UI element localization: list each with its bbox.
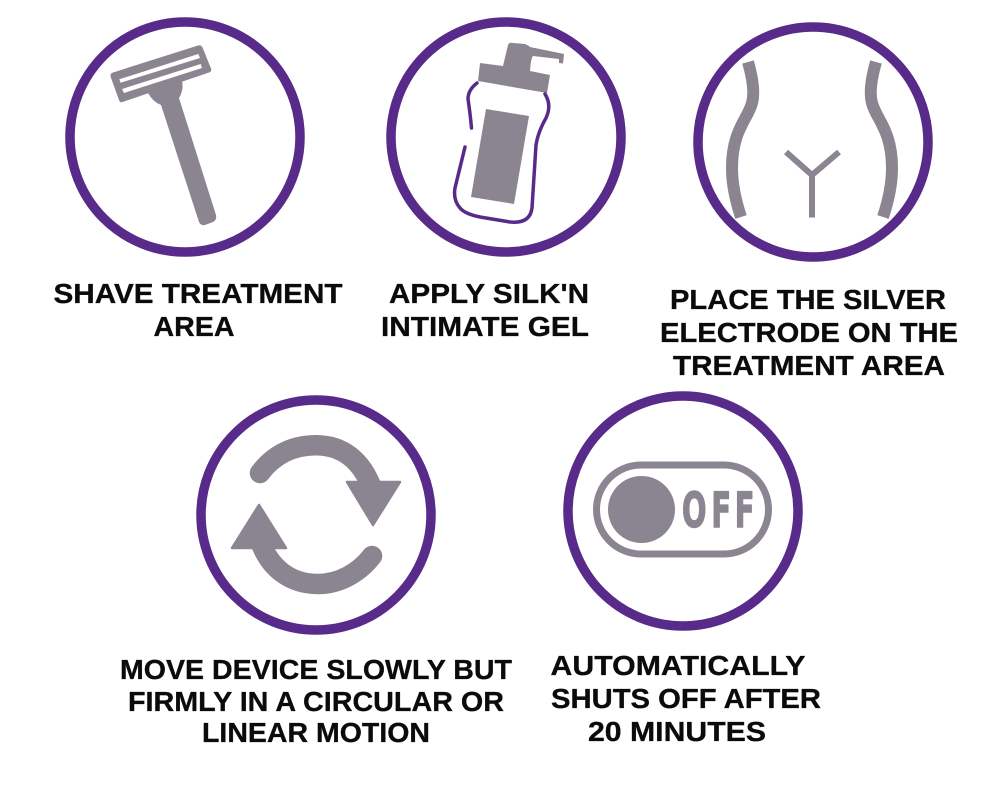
label: APPLY SILK'N bbox=[389, 278, 589, 309]
step 2: apply gel bbox=[381, 22, 621, 342]
label: 20 MINUTES bbox=[588, 716, 766, 747]
label: SHUTS OFF AFTER bbox=[551, 683, 821, 714]
label: LINEAR MOTION bbox=[202, 717, 430, 748]
icon: circular arrows bbox=[232, 445, 400, 584]
icon ring: razor circle bbox=[70, 22, 300, 252]
label: PLACE THE SILVER bbox=[670, 284, 946, 315]
step 5: auto shut off bbox=[550, 396, 821, 747]
icon: body outline bbox=[732, 62, 892, 218]
icon: gel bottle bbox=[455, 43, 564, 222]
label bbox=[120, 654, 512, 748]
icon ring: motion circle bbox=[201, 400, 431, 630]
label: AREA bbox=[154, 311, 235, 342]
step 4: move device bbox=[120, 400, 512, 748]
icon: off switch: OFF bbox=[682, 483, 754, 539]
step 3: place electrode bbox=[660, 27, 958, 381]
icon ring: body circle bbox=[698, 27, 928, 257]
label: INTIMATE GEL bbox=[381, 311, 589, 342]
label: FIRMLY IN A CIRCULAR OR bbox=[128, 686, 504, 717]
label bbox=[381, 278, 589, 342]
label: MOVE DEVICE SLOWLY BUT bbox=[120, 654, 512, 685]
label bbox=[550, 650, 821, 747]
label bbox=[54, 278, 343, 342]
icon: razor bbox=[110, 45, 216, 225]
label: TREATMENT AREA bbox=[673, 350, 945, 381]
icon ring: off switch circle bbox=[568, 396, 798, 626]
label: ELECTRODE ON THE bbox=[660, 317, 958, 348]
icon: off switch bbox=[596, 465, 768, 554]
label: AUTOMATICALLY bbox=[550, 650, 806, 681]
label: SHAVE TREATMENT bbox=[54, 278, 343, 309]
label bbox=[660, 284, 958, 381]
step 1: shave treatment area bbox=[54, 22, 343, 342]
icon ring: gel circle bbox=[391, 22, 621, 252]
